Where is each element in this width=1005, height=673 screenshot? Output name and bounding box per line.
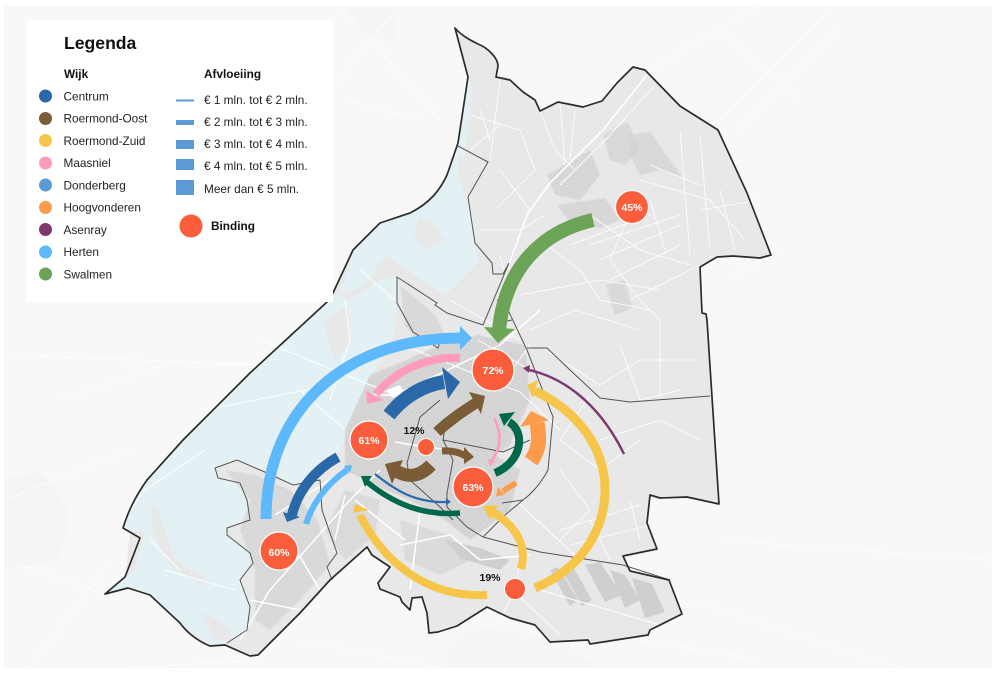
circle: 60%: 60% xyxy=(268,547,290,559)
legend: Wijk: Maasniel xyxy=(64,156,111,170)
industrial estate xyxy=(445,540,665,618)
legend: Wijk: Roermond-Zuid xyxy=(64,134,145,148)
circle: 72%: 72% xyxy=(482,365,504,377)
arrow: Maasniel to 61% xyxy=(366,358,460,404)
legend: Wijk: Roermond-Oost xyxy=(64,112,148,126)
water areas xyxy=(105,28,478,646)
arrow: Hoogvonderen to 72% xyxy=(520,411,549,461)
legend title: Legenda xyxy=(64,33,137,53)
circle: 12%: 12% xyxy=(403,425,425,437)
municipality outline xyxy=(105,28,771,656)
district boundaries xyxy=(215,146,710,643)
circle: 63%: 63% xyxy=(462,482,484,494)
arrow: Donderberg to 63% xyxy=(375,474,451,505)
arrow: Maasniel to 63% xyxy=(488,418,500,466)
circle: 60% xyxy=(260,532,298,570)
arrow: Herten to 61% xyxy=(306,465,352,524)
legend: Afvloeiing: Meer dan € 5 mln. xyxy=(204,182,299,196)
land patches in water xyxy=(126,155,480,640)
arrow: Roermond-Oost to 61% xyxy=(385,460,431,484)
circle: 19% xyxy=(479,572,526,600)
legend: Wijk: Asenray xyxy=(64,223,107,237)
legend: Wijk xyxy=(39,67,148,282)
arrow: Hoogvonderen to 63% xyxy=(496,483,516,496)
circle: 45%: 45% xyxy=(621,202,643,214)
arrow: Centrum to 72% xyxy=(389,367,460,415)
legend: Afvloeiing: € 1 mln. tot € 2 mln. xyxy=(204,93,308,107)
binding circles xyxy=(260,190,648,600)
arrows: flows between districts xyxy=(266,220,624,595)
legend: Afvloeiing xyxy=(176,67,308,196)
legend: Wijk: Swalmen xyxy=(64,268,112,282)
white open area beside the river xyxy=(387,385,405,398)
arrow: Roermond-Oost to 63% xyxy=(442,447,474,464)
circle: 63% xyxy=(453,467,493,507)
municipality land area xyxy=(105,28,771,656)
arrow: Asenray to 72% xyxy=(523,365,624,454)
circle: 19%: 19% xyxy=(479,572,501,584)
circle: 72% xyxy=(472,349,514,391)
legend: Wijk: Hoogvonderen xyxy=(64,200,141,214)
circle: 61% xyxy=(350,421,388,459)
legend: Wijk: Donderberg xyxy=(64,178,126,192)
legend: Afvloeiing: € 2 mln. tot € 3 mln. xyxy=(204,115,308,129)
arrow: Roermond-Zuid to 61% xyxy=(353,504,487,595)
legend: Wijk: Centrum xyxy=(64,90,109,104)
circle: 61%: 61% xyxy=(358,435,380,447)
legend: Afvloeiing: Afvloeiing xyxy=(204,67,261,81)
legend: Wijk: Wijk xyxy=(64,67,89,81)
arrow: dark green to 72% xyxy=(495,412,519,473)
arrow: Herten to Noord (72%) xyxy=(266,326,472,519)
arrow: dark green to 61% xyxy=(361,476,460,513)
arrow: Swalmen to 72% xyxy=(484,220,593,343)
arrow: Roermond-Zuid to 63% xyxy=(483,505,523,569)
legend: Wijk: Herten xyxy=(64,245,99,259)
legend: Afvloeiing: € 4 mln. tot € 5 mln. xyxy=(204,159,308,173)
circle: 45% xyxy=(616,190,648,224)
legend panel xyxy=(27,20,333,302)
arrow: Roermond-Zuid to 72% xyxy=(527,380,605,588)
legend: Binding xyxy=(180,214,255,238)
arrow: Centrum to 60% xyxy=(283,457,338,522)
legend: Binding: Binding xyxy=(211,219,255,233)
legend: Afvloeiing: € 3 mln. tot € 4 mln. xyxy=(204,137,308,151)
arrow: Roermond-Oost to 72% xyxy=(437,392,485,432)
road network xyxy=(120,75,760,640)
circle: 12% xyxy=(403,425,434,456)
residential districts xyxy=(225,122,683,630)
